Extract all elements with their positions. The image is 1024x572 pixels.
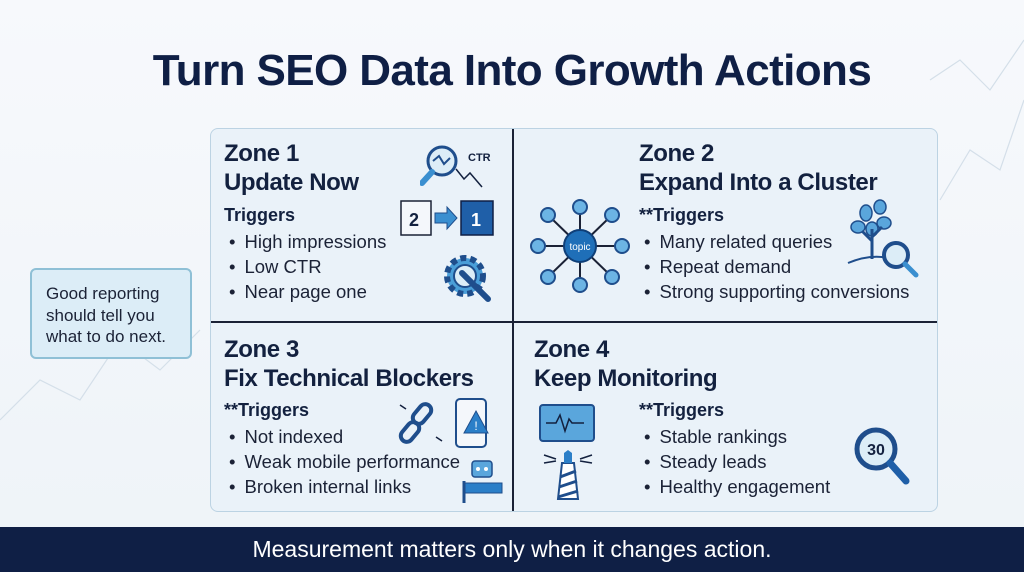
- zone 4 heading: Zone 4: [534, 336, 609, 363]
- zone 3 heading: [224, 336, 474, 392]
- zone 4 heading: Keep Monitoring: [534, 365, 717, 392]
- zone 1 heading: Update Now: [224, 169, 359, 196]
- zone 4 triggers: [639, 400, 830, 497]
- icon: CTR magnifier: [420, 146, 491, 188]
- icon: rank 2 to 1: 2: [409, 210, 419, 230]
- zone 3 triggers: **Triggers: [224, 400, 309, 420]
- panel grid: [210, 128, 938, 512]
- zone 3 triggers: Not indexed: [244, 426, 343, 447]
- icon: lighthouse: [544, 450, 592, 500]
- zone 2 triggers: Repeat demand: [659, 256, 791, 277]
- zone 1 triggers: Low CTR: [244, 256, 322, 277]
- zone 1 heading: [224, 140, 360, 196]
- icon: topic cluster: [530, 199, 630, 293]
- callout: should tell you: [46, 306, 155, 324]
- callout: what to do next.: [46, 327, 166, 346]
- zone 1 triggers: [224, 205, 386, 302]
- icon: broken link: [398, 402, 442, 444]
- zone 3 heading: Fix Technical Blockers: [224, 365, 474, 392]
- zone 2 heading: Expand Into a Cluster: [639, 169, 877, 196]
- icon: CTR magnifier: CTR: [468, 152, 491, 164]
- zone 3: [224, 336, 502, 503]
- zone 3 triggers: Broken internal links: [244, 476, 411, 497]
- callout: Good reporting: [46, 284, 159, 303]
- icon: rank 2 to 1: 1: [471, 210, 481, 230]
- zone 2 triggers: [639, 205, 909, 302]
- zone 4 heading: [534, 336, 717, 392]
- footer banner: Measurement matters only when it changes action.: [252, 536, 772, 562]
- zone 2: [530, 140, 918, 302]
- footer banner: [0, 527, 1024, 572]
- title: Turn SEO Data Into Growth Actions: [153, 46, 871, 95]
- zone 4 triggers: Stable rankings: [659, 426, 787, 447]
- zone 1 heading: Zone 1: [224, 140, 299, 167]
- zone 2 triggers: Many related queries: [659, 231, 832, 252]
- zone 2 triggers: Strong supporting conversions: [659, 281, 909, 302]
- icon: gear wrench: [444, 255, 491, 302]
- zone 3 triggers: Weak mobile performance: [244, 451, 460, 472]
- icon: topic cluster: topic: [569, 242, 591, 253]
- zone 4 triggers: Healthy engagement: [659, 476, 830, 497]
- icon: tree magnifier: [848, 199, 918, 278]
- zone 4: [534, 336, 910, 500]
- callout: [30, 268, 192, 359]
- zone 4 triggers: Steady leads: [659, 451, 766, 472]
- zone 1 triggers: High impressions: [244, 231, 386, 252]
- zone 2 heading: Zone 2: [639, 140, 714, 167]
- icon: monitor pulse: [539, 404, 595, 442]
- zone 3 triggers: [224, 400, 460, 497]
- icon: robot barrier: [462, 460, 502, 503]
- icon: rank 2 to 1: [400, 200, 494, 236]
- zone 1 triggers: Near page one: [244, 281, 367, 302]
- icon: mobile warning: [455, 398, 489, 448]
- zone 2 triggers: **Triggers: [639, 205, 724, 225]
- zone 2 heading: [639, 140, 878, 196]
- zone 3 heading: Zone 3: [224, 336, 299, 363]
- icon: magnifier 30: [854, 428, 910, 484]
- zone 4 triggers: **Triggers: [639, 400, 724, 420]
- icon: magnifier 30: 30: [867, 442, 885, 459]
- zone 1: [224, 140, 494, 302]
- icon: mobile warning: !: [474, 419, 478, 433]
- zone 1 triggers: Triggers: [224, 205, 295, 225]
